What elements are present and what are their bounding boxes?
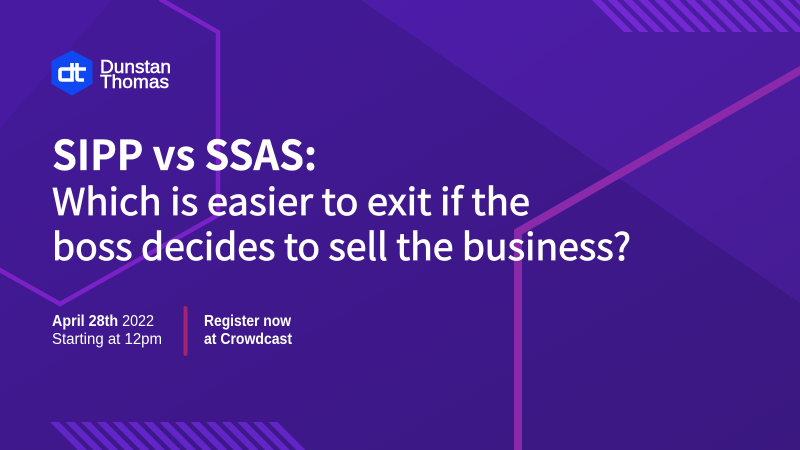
title — [52, 122, 631, 271]
hexagon outline: left — [0, 0, 218, 304]
light panel: top left — [0, 0, 112, 128]
title: SIPP vs SSAS: — [52, 122, 317, 182]
stripes: top right — [592, 0, 800, 32]
event date and time: Starting at 12pm — [52, 331, 162, 348]
event date and time: April 28th 2022 — [52, 313, 154, 330]
light panel: top right — [361, 0, 800, 303]
call to action: Register now — [204, 313, 292, 330]
title: boss decides to sell the business? — [52, 217, 631, 271]
logo wordmark — [100, 56, 171, 92]
stripes: bottom left — [50, 422, 305, 450]
logo wordmark: Thomas — [100, 71, 169, 92]
icon: hexagon logo mark — [53, 52, 91, 94]
call to action — [204, 313, 292, 348]
call to action: at Crowdcast — [204, 331, 292, 348]
title: Which is easier to exit if the — [52, 172, 530, 226]
logo wordmark: Dunstan — [100, 56, 171, 77]
hexagon outline: right — [518, 67, 800, 450]
event date and time — [52, 313, 162, 348]
divider bar — [184, 306, 188, 356]
logo — [53, 52, 171, 94]
